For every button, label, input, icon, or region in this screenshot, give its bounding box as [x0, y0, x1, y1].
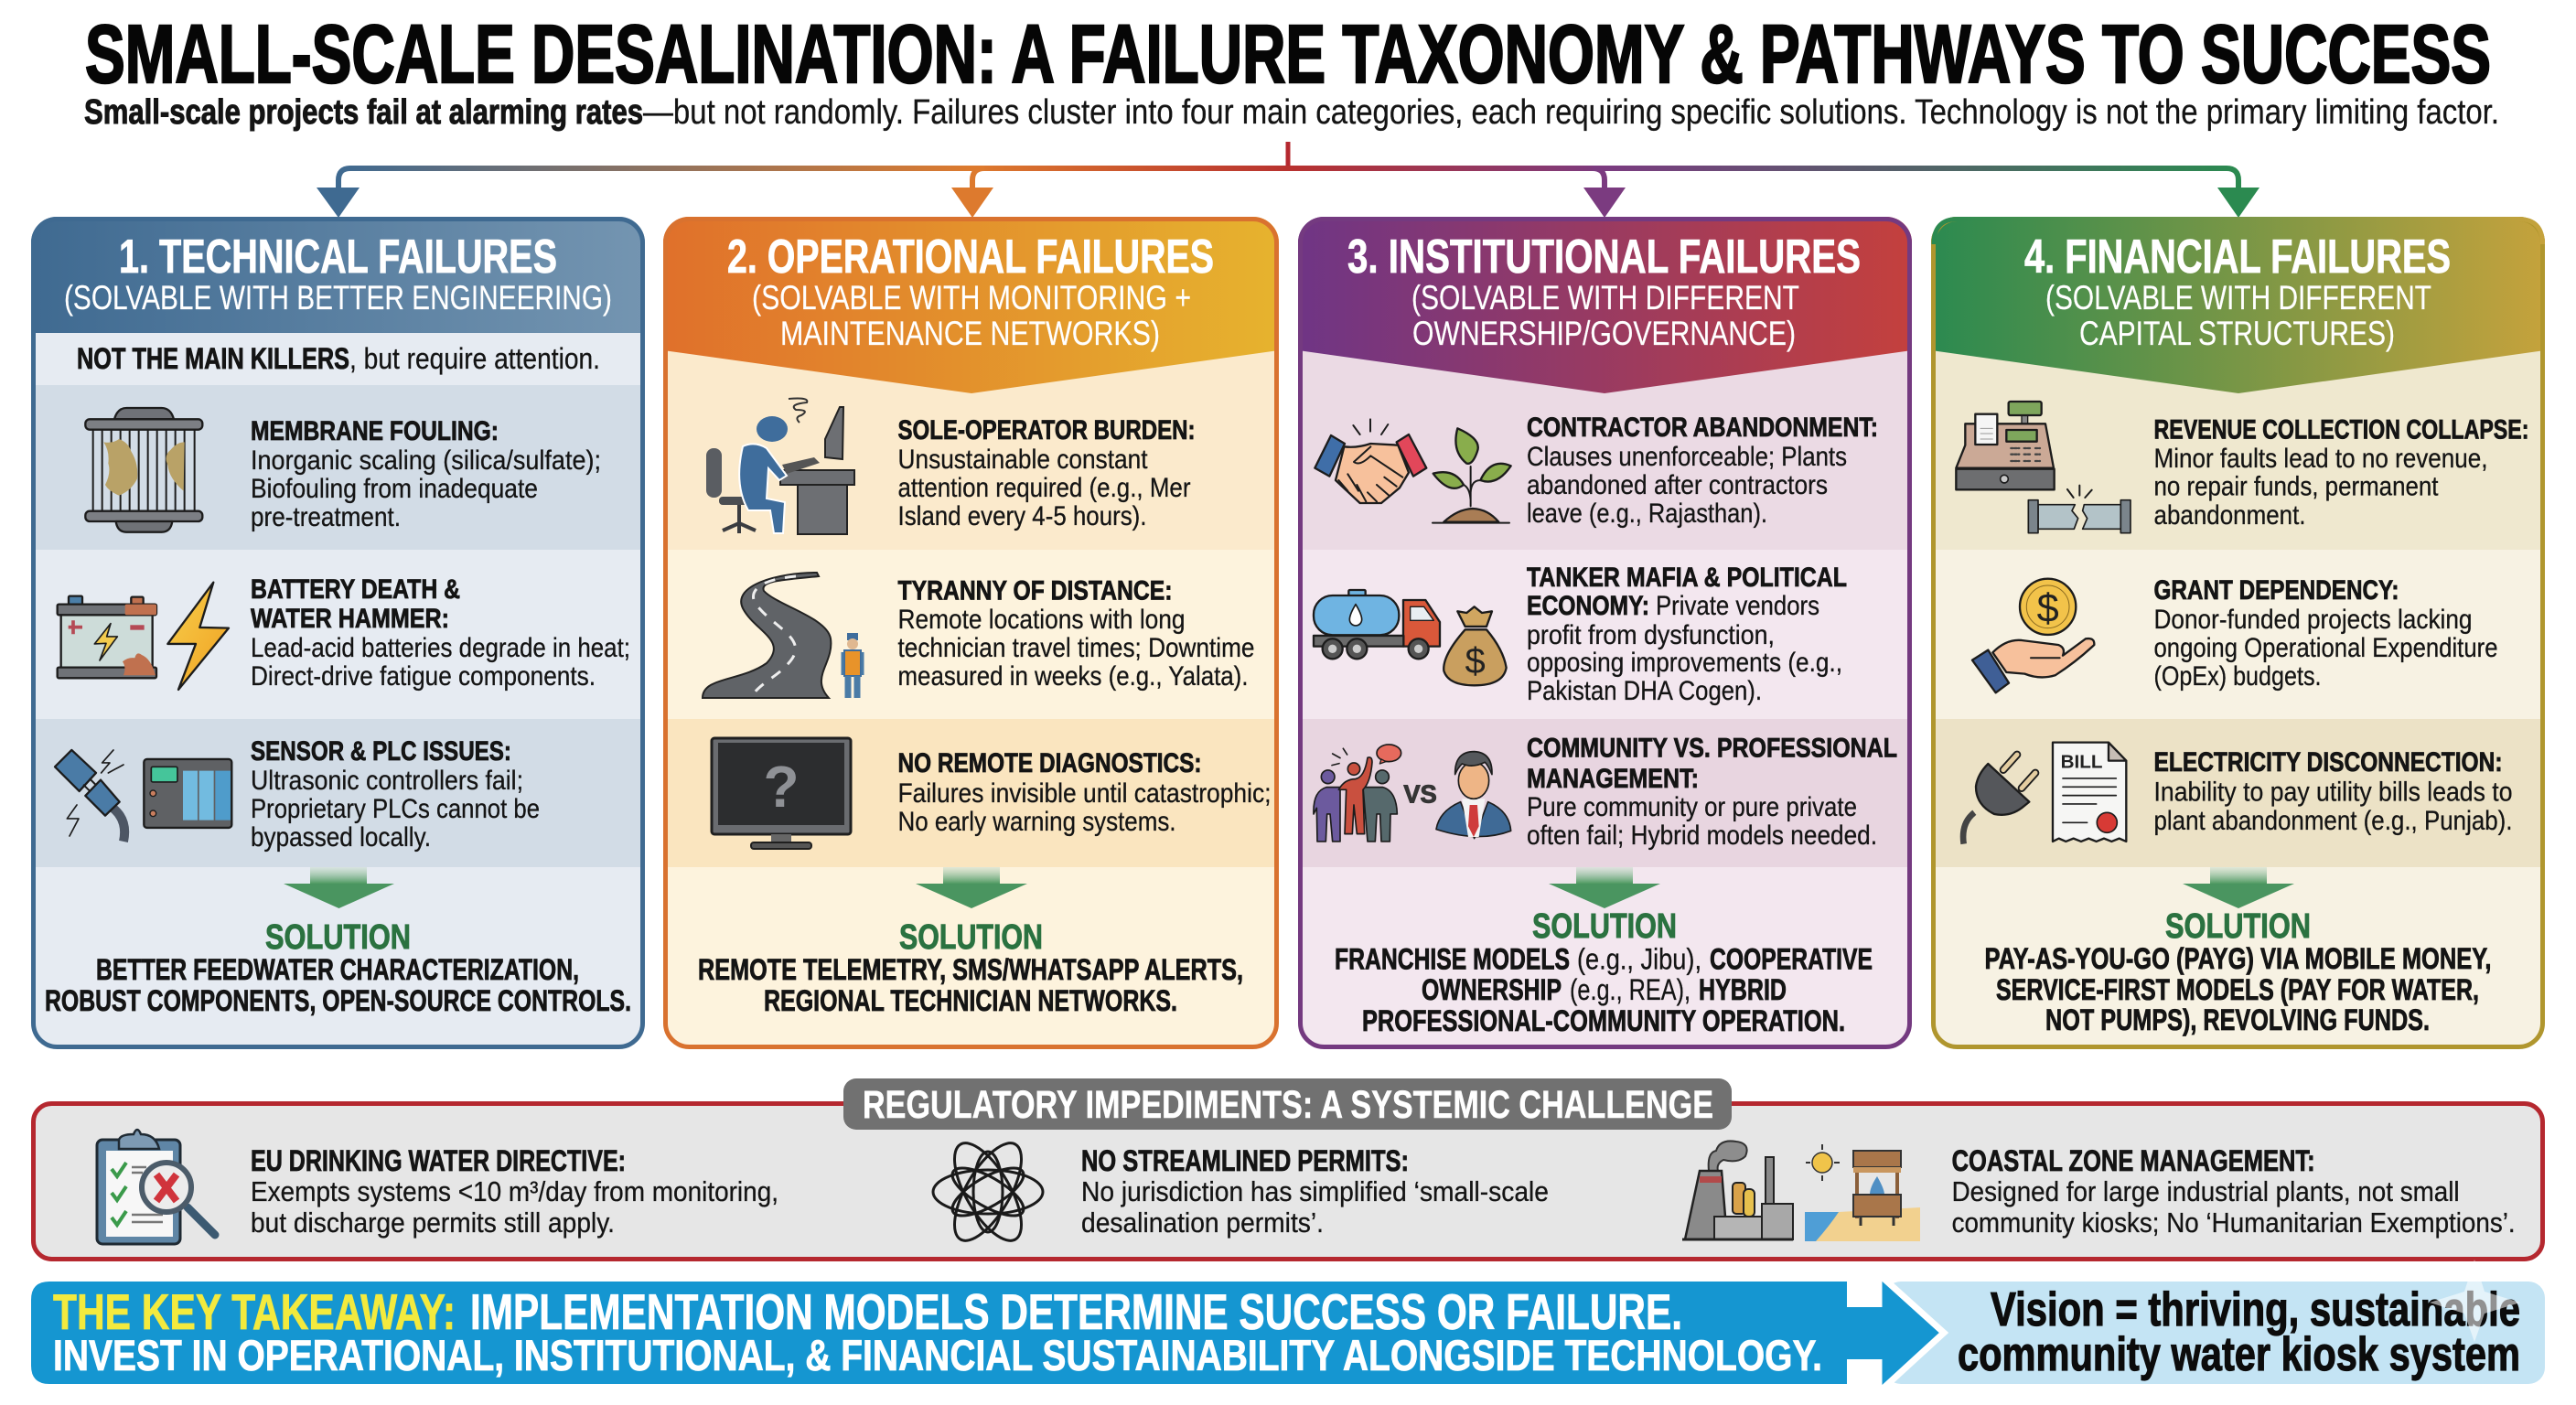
icon: cash register and broken pipe — [1956, 402, 2131, 533]
text: membrane fouling: MEMBRANE FOULING: — [251, 416, 499, 446]
text: no streamlined permits: No jurisdiction has simplified ‘small-scale — [1081, 1175, 1549, 1207]
panel: 4. financial failures — [1931, 217, 2545, 1049]
text: community vs professional management: often fail; Hybrid models needed. — [1527, 820, 1877, 851]
solution: technical: SOLUTION — [265, 918, 411, 957]
heading: operational failures: (SOLVABLE WITH MONITORING + — [752, 279, 1191, 316]
text: tyranny of distance: Remote locations with long — [898, 605, 1186, 635]
text: tyranny of distance: TYRANNY OF DISTANCE: — [898, 576, 1173, 606]
heading pill: regulatory impediments: REGULATORY IMPEDIMENTS: A SYSTEMIC CHALLENGE — [863, 1083, 1713, 1127]
text: battery death and water hammer: WATER HAMMER: — [251, 604, 449, 634]
icon: plug and unpaid bill: BILL — [2061, 751, 2103, 772]
text: revenue collection collapse: abandonment. — [2153, 500, 2305, 531]
text: coastal zone management — [1952, 1144, 2516, 1239]
solution: operational — [698, 918, 1243, 1017]
text: community vs professional management: COMMUNITY VS. PROFESSIONAL — [1527, 734, 1897, 763]
text: sole-operator burden: attention required (e.g., Mer — [898, 473, 1191, 503]
solution: financial: NOT PUMPS), REVOLVING FUNDS. — [2045, 1003, 2430, 1036]
text: sole-operator burden: Island every 4-5 hours). — [898, 501, 1147, 531]
text: tanker mafia and political economy — [1527, 563, 1847, 706]
icon: plug and unpaid bill — [1963, 743, 2126, 844]
text: electricity disconnection: plant abandonment (e.g., Punjab). — [2153, 806, 2512, 836]
text: no remote diagnostics — [898, 748, 1272, 837]
text: sensor and PLC issues: Ultrasonic controllers fail; — [251, 766, 523, 796]
text: tanker mafia and political economy: Pakistan DHA Cogen). — [1527, 676, 1762, 706]
text: grant dependency: (OpEx) budgets. — [2153, 661, 2322, 692]
icon: blank monitor with question mark — [712, 738, 851, 849]
icon: hand receiving coin — [1972, 579, 2094, 692]
heading: operational failures — [727, 231, 1214, 352]
icon: failing sensor and PLC — [55, 750, 231, 842]
text: no streamlined permits: NO STREAMLINED PERMITS: — [1081, 1144, 1409, 1177]
text: tyranny of distance: technician travel times; Downtime — [898, 633, 1255, 663]
text: contractor abandonment: Clauses unenforceable; Plants — [1527, 442, 1847, 472]
solution: institutional: COOPERATIVE — [1710, 942, 1873, 975]
panel: 2. operational failures — [663, 217, 1279, 1049]
heading: financial failures: (SOLVABLE WITH DIFFERENT — [2045, 279, 2431, 316]
icon: fouled membrane — [85, 408, 202, 532]
text: key takeaway: IMPLEMENTATION MODELS DETERMINE SUCCESS OR FAILURE. — [470, 1283, 1682, 1340]
text: grant dependency — [2153, 575, 2497, 692]
text: tanker mafia and political economy: Private vendors — [1656, 591, 1819, 621]
text: community vs professional management: MANAGEMENT: — [1527, 764, 1699, 794]
text: contractor abandonment — [1527, 413, 1878, 529]
text: tanker mafia and political economy: profit from dysfunction, — [1527, 620, 1775, 650]
text: sole-operator burden: Unsustainable constant — [898, 445, 1148, 475]
panel: vision box — [1884, 1282, 2545, 1384]
icon: community versus professional manager: VS — [1403, 780, 1437, 809]
solution: operational: SOLUTION — [899, 918, 1043, 957]
text: sensor and PLC issues: Proprietary PLCs cannot be — [251, 794, 540, 824]
solution: financial — [1985, 907, 2492, 1036]
text: tanker mafia and political economy: ECONOMY: — [1527, 591, 1649, 621]
text: coastal zone management: community kiosks; No ‘Humanitarian Exemptions’. — [1952, 1207, 2516, 1239]
text: coastal zone management: COASTAL ZONE MANAGEMENT: — [1952, 1144, 2315, 1177]
text: battery death and water hammer: Direct-drive fatigue components. — [251, 661, 596, 692]
icon: tangled permit loops — [933, 1133, 1043, 1250]
text: revenue collection collapse: no repair funds, permanent — [2153, 472, 2439, 501]
text: contractor abandonment: leave (e.g., Rajasthan). — [1527, 499, 1767, 529]
text: vision statement — [1958, 1283, 2520, 1381]
text: contractor abandonment: CONTRACTOR ABANDONMENT: — [1527, 413, 1878, 443]
heading: institutional failures: 3. INSTITUTIONAL FAILURES — [1347, 231, 1861, 284]
text: no streamlined permits — [1081, 1144, 1549, 1239]
text: contractor abandonment: abandoned after contractors — [1527, 470, 1828, 500]
solution: institutional: (e.g., Jibu), — [1577, 942, 1701, 975]
text: revenue collection collapse: Minor faults lead to no revenue, — [2153, 444, 2488, 474]
icon: exhausted sole operator at desk — [706, 399, 854, 534]
heading: institutional failures: (SOLVABLE WITH DIFFERENT — [1411, 279, 1799, 316]
text: battery death and water hammer — [251, 574, 630, 692]
solution: technical: BETTER FEEDWATER CHARACTERIZATION, — [96, 953, 579, 986]
heading: institutional failures — [1347, 231, 1861, 352]
text: battery death and water hammer: Lead-acid batteries degrade in heat; — [251, 633, 630, 663]
icon: hand receiving coin: $ — [2037, 586, 2059, 630]
icon: corroded battery and lightning — [58, 583, 229, 690]
solution: institutional — [1335, 907, 1873, 1037]
connector arrows from subtitle to the four panels — [317, 142, 2259, 218]
icon: handshake and sapling — [1315, 419, 1511, 523]
arrow: to solution — [1549, 867, 1660, 908]
text: key takeaway — [53, 1283, 1822, 1379]
text: EU drinking water directive — [251, 1144, 778, 1239]
arrow: to solution — [2183, 867, 2294, 908]
text: sensor and PLC issues: bypassed locally. — [251, 822, 431, 853]
text: grant dependency: GRANT DEPENDENCY: — [2153, 575, 2399, 606]
text: electricity disconnection: ELECTRICITY DISCONNECTION: — [2153, 747, 2503, 778]
text: electricity disconnection — [2153, 747, 2512, 836]
subtitle: Small-scale projects fail at alarming rates — [84, 93, 643, 132]
text: no remote diagnostics: No early warning systems. — [898, 807, 1176, 837]
text: sole-operator burden — [898, 415, 1195, 531]
text: key takeaway: THE KEY TAKEAWAY: — [53, 1283, 456, 1340]
solution: institutional: PROFESSIONAL-COMMUNITY OPERATION. — [1362, 1004, 1845, 1037]
solution: institutional: (e.g., REA), — [1570, 973, 1690, 1006]
heading: operational failures: MAINTENANCE NETWORKS) — [780, 315, 1160, 352]
text: no streamlined permits: desalination permits’. — [1081, 1207, 1324, 1239]
icon: checklist under magnifying glass — [97, 1130, 215, 1244]
solution: operational: REMOTE TELEMETRY, SMS/WHATSAPP ALERTS, — [698, 953, 1243, 986]
icon: blank monitor with question mark: ? — [763, 754, 800, 820]
text: sole-operator burden: SOLE-OPERATOR BURDEN: — [898, 415, 1195, 445]
text: no remote diagnostics: Failures invisible until catastrophic; — [898, 778, 1272, 809]
panel: 1. technical failures — [31, 217, 645, 1049]
panel: 3. institutional failures — [1298, 217, 1912, 1049]
text: EU drinking water directive: Exempts systems <10 m³/day from monitoring, — [251, 1175, 778, 1207]
text: grant dependency: Donor-funded projects lacking — [2153, 605, 2472, 635]
text: key takeaway: INVEST IN OPERATIONAL, INSTITUTIONAL, & FINANCIAL SUSTAINABILITY ALONGSIDE TECHNOLOGY. — [53, 1331, 1822, 1379]
heading: institutional failures: OWNERSHIP/GOVERNANCE) — [1412, 315, 1796, 352]
icon: sparkle watermark — [2430, 1260, 2520, 1342]
text: membrane fouling: pre-treatment. — [251, 502, 401, 532]
text: membrane fouling: Inorganic scaling (silica/sulfate); — [251, 445, 601, 476]
text: not the main killers — [77, 342, 600, 375]
text: sensor and PLC issues — [251, 736, 540, 853]
heading: technical failures: (SOLVABLE WITH BETTER ENGINEERING) — [64, 279, 612, 316]
heading: operational failures: 2. OPERATIONAL FAILURES — [727, 231, 1214, 284]
text: coastal zone management: Designed for large industrial plants, not small — [1952, 1175, 2460, 1207]
text: battery death and water hammer: BATTERY DEATH & — [251, 574, 460, 605]
icon: community versus professional manager — [1314, 745, 1511, 842]
text: community vs professional management — [1527, 734, 1897, 851]
icon: beach water kiosk — [1805, 1144, 1920, 1241]
arrow: to solution — [284, 867, 394, 908]
heading: financial failures — [2024, 231, 2451, 352]
icon: industrial plant — [1682, 1141, 1793, 1239]
solution: institutional: HYBRID — [1699, 973, 1787, 1006]
text: electricity disconnection: Inability to pay utility bills leads to — [2153, 778, 2512, 807]
icon: long winding road and technician — [703, 573, 863, 698]
text: not the main killers: NOT THE MAIN KILLERS — [77, 342, 349, 375]
heading: technical failures: 1. TECHNICAL FAILURES — [119, 231, 557, 284]
text: EU drinking water directive: EU DRINKING WATER DIRECTIVE: — [251, 1144, 626, 1177]
text: EU drinking water directive: but discharge permits still apply. — [251, 1207, 615, 1239]
text: tyranny of distance: measured in weeks (e.g., Yalata). — [898, 661, 1248, 692]
arrow: to solution — [916, 867, 1027, 908]
heading: financial failures: 4. FINANCIAL FAILURES — [2024, 231, 2451, 284]
panel: key takeaway arrow banner — [31, 1274, 1944, 1392]
text: sensor and PLC issues: SENSOR & PLC ISSUES: — [251, 736, 511, 767]
text: tanker mafia and political economy: TANKER MAFIA & POLITICAL — [1527, 563, 1847, 593]
text: grant dependency: ongoing Operational Expenditure — [2153, 633, 2497, 663]
icon: water tanker and money bag — [1314, 590, 1507, 685]
solution: operational: REGIONAL TECHNICIAN NETWORKS. — [764, 984, 1177, 1017]
text: revenue collection collapse — [2153, 415, 2528, 531]
solution: institutional: OWNERSHIP — [1422, 973, 1562, 1006]
icon: water tanker and money bag: $ — [1465, 641, 1486, 681]
text: tanker mafia and political economy: opposing improvements (e.g., — [1527, 648, 1842, 678]
solution: institutional: SOLUTION — [1532, 907, 1677, 946]
solution: technical — [45, 918, 631, 1017]
heading: technical failures — [64, 231, 612, 316]
text: tyranny of distance — [898, 576, 1255, 692]
text: not the main killers: , but require attention. — [349, 342, 600, 375]
text: membrane fouling — [251, 416, 601, 532]
solution: financial: SOLUTION — [2165, 907, 2311, 946]
text: membrane fouling: Biofouling from inadequate — [251, 474, 538, 504]
solution: institutional: FRANCHISE MODELS — [1335, 942, 1570, 975]
text: community vs professional management: Pure community or pure private — [1527, 792, 1857, 822]
heading: financial failures: CAPITAL STRUCTURES) — [2079, 315, 2395, 352]
text: no remote diagnostics: NO REMOTE DIAGNOSTICS: — [898, 748, 1202, 778]
panel: regulatory impediments — [33, 1078, 2543, 1259]
solution: technical: ROBUST COMPONENTS, OPEN-SOURCE CONTROLS. — [45, 984, 631, 1017]
